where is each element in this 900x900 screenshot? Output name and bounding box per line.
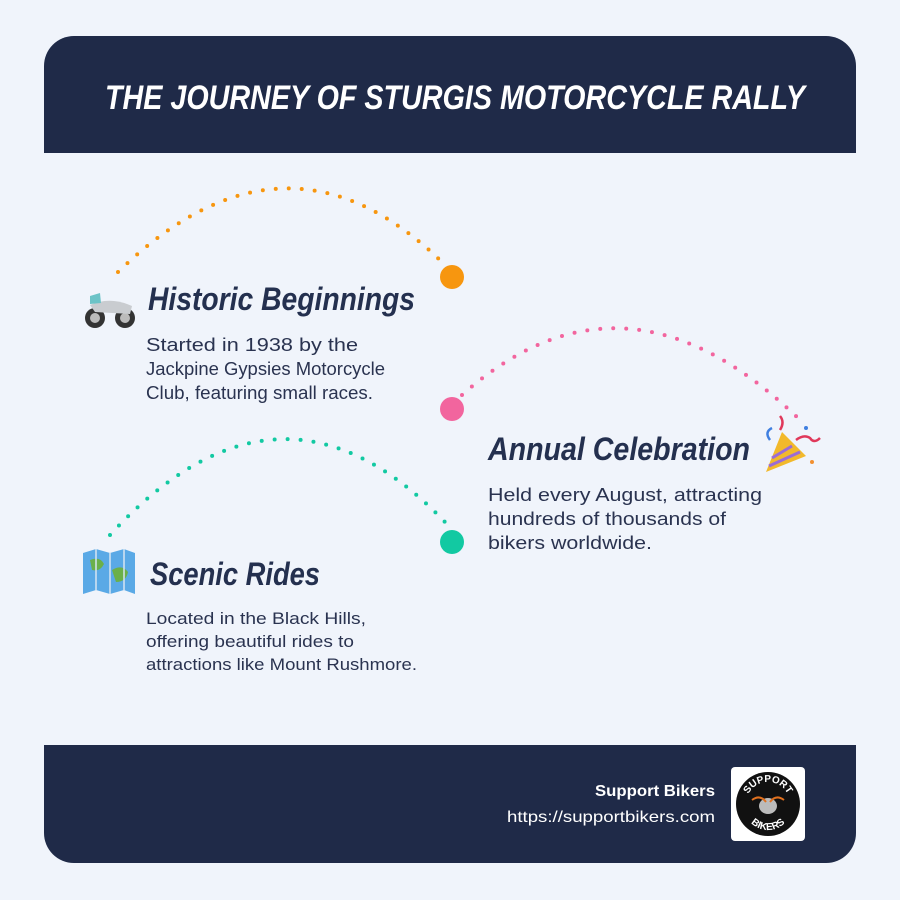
- footer: url: https://supportbikers.com: [507, 809, 715, 826]
- text: annual celebration: hundreds of thousands of: [488, 509, 727, 529]
- heading: Historic Beginnings: Historic Beginnings: [148, 281, 415, 317]
- text: annual celebration: bikers worldwide.: [488, 533, 652, 553]
- arc: teal: [110, 439, 464, 554]
- text: annual celebration: Held every August, attracting: [488, 485, 762, 505]
- text: historic beginnings: Started in 1938 by the: [146, 335, 358, 355]
- icon: party popper: [766, 416, 820, 472]
- text: historic beginnings: Jackpine Gypsies Motorcycle: [146, 359, 385, 379]
- footer panel: [44, 745, 856, 863]
- text: scenic rides: offering beautiful rides to: [146, 633, 354, 651]
- text: historic beginnings: [146, 335, 385, 403]
- footer: brand name: Support Bikers: [595, 783, 715, 800]
- text: scenic rides: Located in the Black Hills,: [146, 610, 366, 628]
- heading: Scenic Rides: Scenic Rides: [150, 556, 320, 592]
- logo: SUPPORT: [744, 775, 794, 793]
- text: scenic rides: attractions like Mount Rushmore.: [146, 656, 417, 674]
- heading: Annual Celebration: Annual Celebration: [487, 431, 750, 467]
- text: historic beginnings: Club, featuring small races.: [146, 383, 373, 403]
- logo: BIKERS: [751, 818, 784, 830]
- arc: pink: [440, 328, 800, 421]
- text: annual celebration: [488, 485, 762, 553]
- icon: motorcycle: [85, 293, 135, 328]
- logo: [731, 767, 805, 841]
- header panel: [44, 36, 856, 153]
- text: scenic rides: [146, 610, 417, 674]
- icon: map: [83, 549, 135, 594]
- arc: orange: [118, 188, 464, 289]
